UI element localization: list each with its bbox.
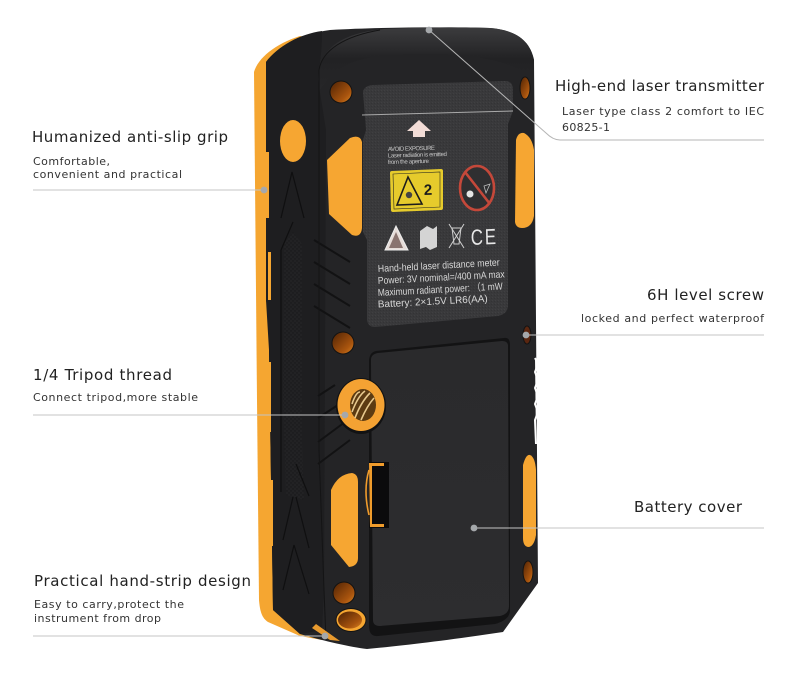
icon: laser class 2 sticker: 2 [424, 182, 432, 199]
callout: hand-strip design: instrument from drop [34, 612, 161, 625]
warning text: from the aperture [388, 159, 430, 166]
callout: laser transmitter [426, 27, 765, 140]
callout: humanized anti-slip grip [32, 128, 267, 193]
icon: CE mark: E [484, 225, 496, 250]
label plate [363, 81, 513, 327]
icon: manual book [420, 226, 437, 250]
callout: humanized anti-slip grip: Comfortable, [33, 155, 110, 168]
callout: waterproof screw: 6H level screw [647, 286, 764, 304]
battery latch [366, 462, 389, 528]
side ribs [314, 240, 350, 464]
warning text: Laser radiation is emitted [388, 152, 447, 159]
orange oval [280, 120, 306, 162]
battery cover recess [369, 338, 510, 636]
callout: laser transmitter: High-end laser transmitter [555, 77, 765, 95]
bottom strap hole [336, 608, 366, 632]
icon: no-look laser sign [460, 166, 494, 210]
plate divider [362, 111, 513, 115]
orange pads [327, 133, 536, 567]
icon: caution triangle [385, 226, 408, 250]
plate specification text: Maximum radiant power: （1 mW [378, 280, 503, 299]
plate specification text: Battery: 2×1.5V LR6(AA) [378, 294, 488, 310]
warning text: AVOID EXPOSURE [388, 146, 435, 153]
callout: battery cover [471, 498, 764, 531]
callout: laser transmitter: 60825-1 [562, 121, 610, 134]
orange side shell [254, 36, 322, 640]
plate specification text [378, 258, 505, 310]
device: laser distance meter [254, 27, 538, 649]
callout: waterproof screw [523, 286, 765, 338]
callout: humanized anti-slip grip: Humanized anti-slip grip [32, 128, 228, 146]
icon: WEEE bin [449, 224, 464, 248]
callout: laser transmitter: Laser type class 2 comfort to IEC [562, 105, 764, 118]
callout: tripod thread: Connect tripod,more stable [33, 391, 198, 404]
left side panel shading [266, 31, 326, 634]
battery cover [371, 341, 509, 626]
top edge highlight [320, 27, 534, 90]
screw holes [330, 77, 533, 604]
right side ridges [535, 358, 538, 444]
grip chevrons [281, 172, 309, 594]
callout: hand-strip design: Easy to carry,protect the [34, 598, 184, 611]
dotted grip strip [283, 232, 304, 500]
callout: tripod thread [33, 366, 348, 418]
callout: tripod thread: 1/4 Tripod thread [33, 366, 172, 384]
callout: humanized anti-slip grip: convenient and practical [33, 168, 182, 181]
plate specification text: Power: 3V nominal=/400 mA max [378, 269, 505, 287]
icon: CE mark [470, 225, 496, 251]
callout: hand-strip design [33, 572, 328, 639]
callout: battery cover: Battery cover [634, 498, 743, 516]
icon: CE mark: C [470, 225, 483, 251]
side grip notches [266, 152, 273, 546]
front face outline [319, 30, 380, 640]
tripod thread [336, 378, 386, 434]
warning text [388, 146, 447, 166]
callout: waterproof screw: locked and perfect waterproof [581, 312, 765, 325]
arrow icon [407, 120, 431, 137]
strap slot wedge [312, 624, 340, 641]
black rubber body [266, 27, 538, 649]
icon: laser class 2 sticker [390, 169, 443, 212]
callout: hand-strip design: Practical hand-strip design [34, 572, 251, 590]
plate specification text: Hand-held laser distance meter [378, 258, 501, 275]
